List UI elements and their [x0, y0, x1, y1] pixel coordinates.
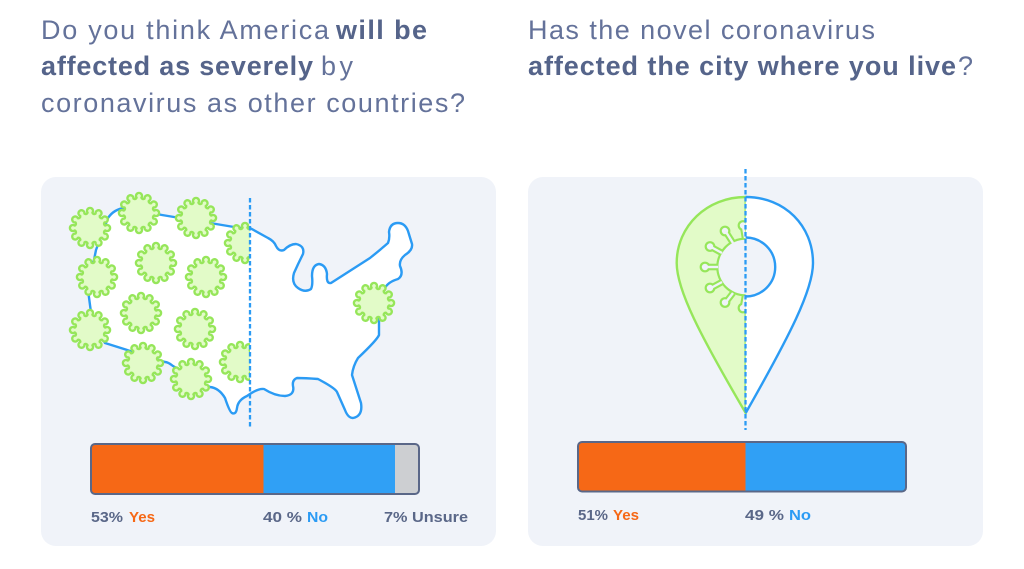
panel: America affected [41, 177, 496, 546]
panel: city affected [528, 169, 983, 546]
heading: left question [41, 15, 465, 118]
label: 53% Yes: Yes [129, 509, 155, 526]
heading: left question: Do you think America [41, 15, 330, 45]
heading: left question: by [321, 51, 354, 81]
icons: virus cluster [70, 193, 394, 399]
bar chart: city [578, 442, 906, 492]
label: 51% Yes: 51% [578, 507, 608, 524]
label: 49% No: No [789, 507, 811, 524]
label: 53% Yes: 53% [91, 509, 123, 526]
label: 40% No: 40 % [263, 509, 302, 526]
label: 49% No: 49 % [745, 507, 784, 524]
heading: left question: coronavirus as other countries? [41, 88, 465, 118]
heading: left question: affected as severely [41, 51, 313, 81]
label: 51% Yes [578, 507, 639, 524]
label: 40% No: No [307, 509, 328, 526]
label: 40% No [263, 509, 328, 526]
heading: right question: affected the city where you live [528, 51, 956, 81]
label: 49% No [745, 507, 811, 524]
label: 51% Yes: Yes [613, 507, 639, 524]
bar chart: America [91, 444, 419, 494]
label: 7% Unsure: 7% Unsure [384, 509, 468, 526]
heading: right question: ? [958, 51, 973, 81]
heading: right question: Has the novel coronavirus [528, 15, 875, 45]
heading: right question [528, 15, 973, 81]
divider: dashed line on map [249, 198, 251, 429]
icon: location pin with virus [677, 197, 813, 413]
map: United States outline [88, 208, 412, 418]
divider: dashed line on pin [744, 169, 747, 430]
heading: left question: will be [335, 15, 427, 45]
label: 53% Yes [91, 509, 155, 526]
